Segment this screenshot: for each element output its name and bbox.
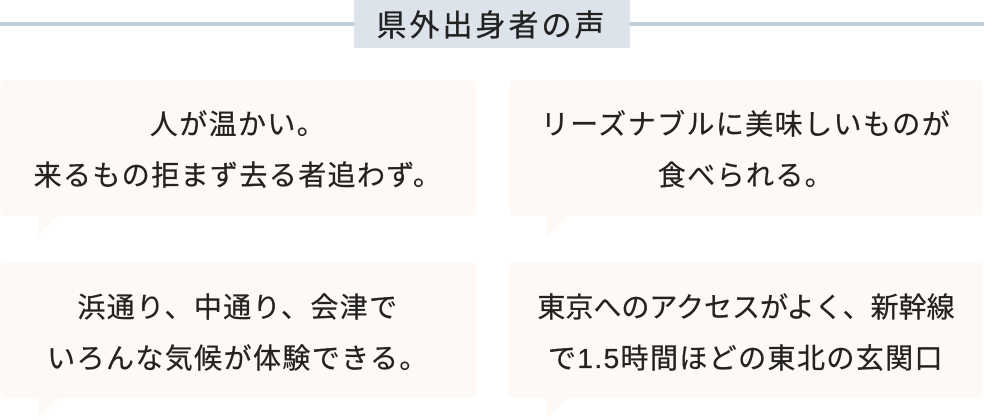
panel: voice 1 speech bubble xyxy=(0,80,476,236)
text: voice 1: 来るもの拒まず去る者追わず。 xyxy=(34,160,442,191)
text: voice 2 xyxy=(541,109,951,191)
title xyxy=(354,0,630,48)
panel: voice 2 speech bubble xyxy=(509,80,983,236)
text: voice 3: 浜通り、中通り、会津で xyxy=(77,292,399,323)
text: voice 3: いろんな気候が体験できる。 xyxy=(47,343,429,374)
panel: voice 3 speech bubble xyxy=(0,262,476,418)
panel: voice 4 speech bubble xyxy=(509,262,983,418)
header rule left xyxy=(0,22,354,26)
text: voice 4: 東京へのアクセスがよく、新幹線 xyxy=(537,292,955,323)
title: 県外出身者の声 xyxy=(376,10,608,43)
text: voice 1 xyxy=(34,109,442,191)
text: voice 1: 人が温かい。 xyxy=(150,109,326,140)
text: voice 2: 食べられる。 xyxy=(658,160,834,191)
text: voice 2: リーズナブルに美味しいものが xyxy=(541,109,951,140)
text: voice 4 xyxy=(537,292,955,374)
header rule right xyxy=(630,22,984,26)
text: voice 3 xyxy=(47,292,429,374)
text: voice 4: で1.5時間ほどの東北の玄関口 xyxy=(548,343,944,374)
